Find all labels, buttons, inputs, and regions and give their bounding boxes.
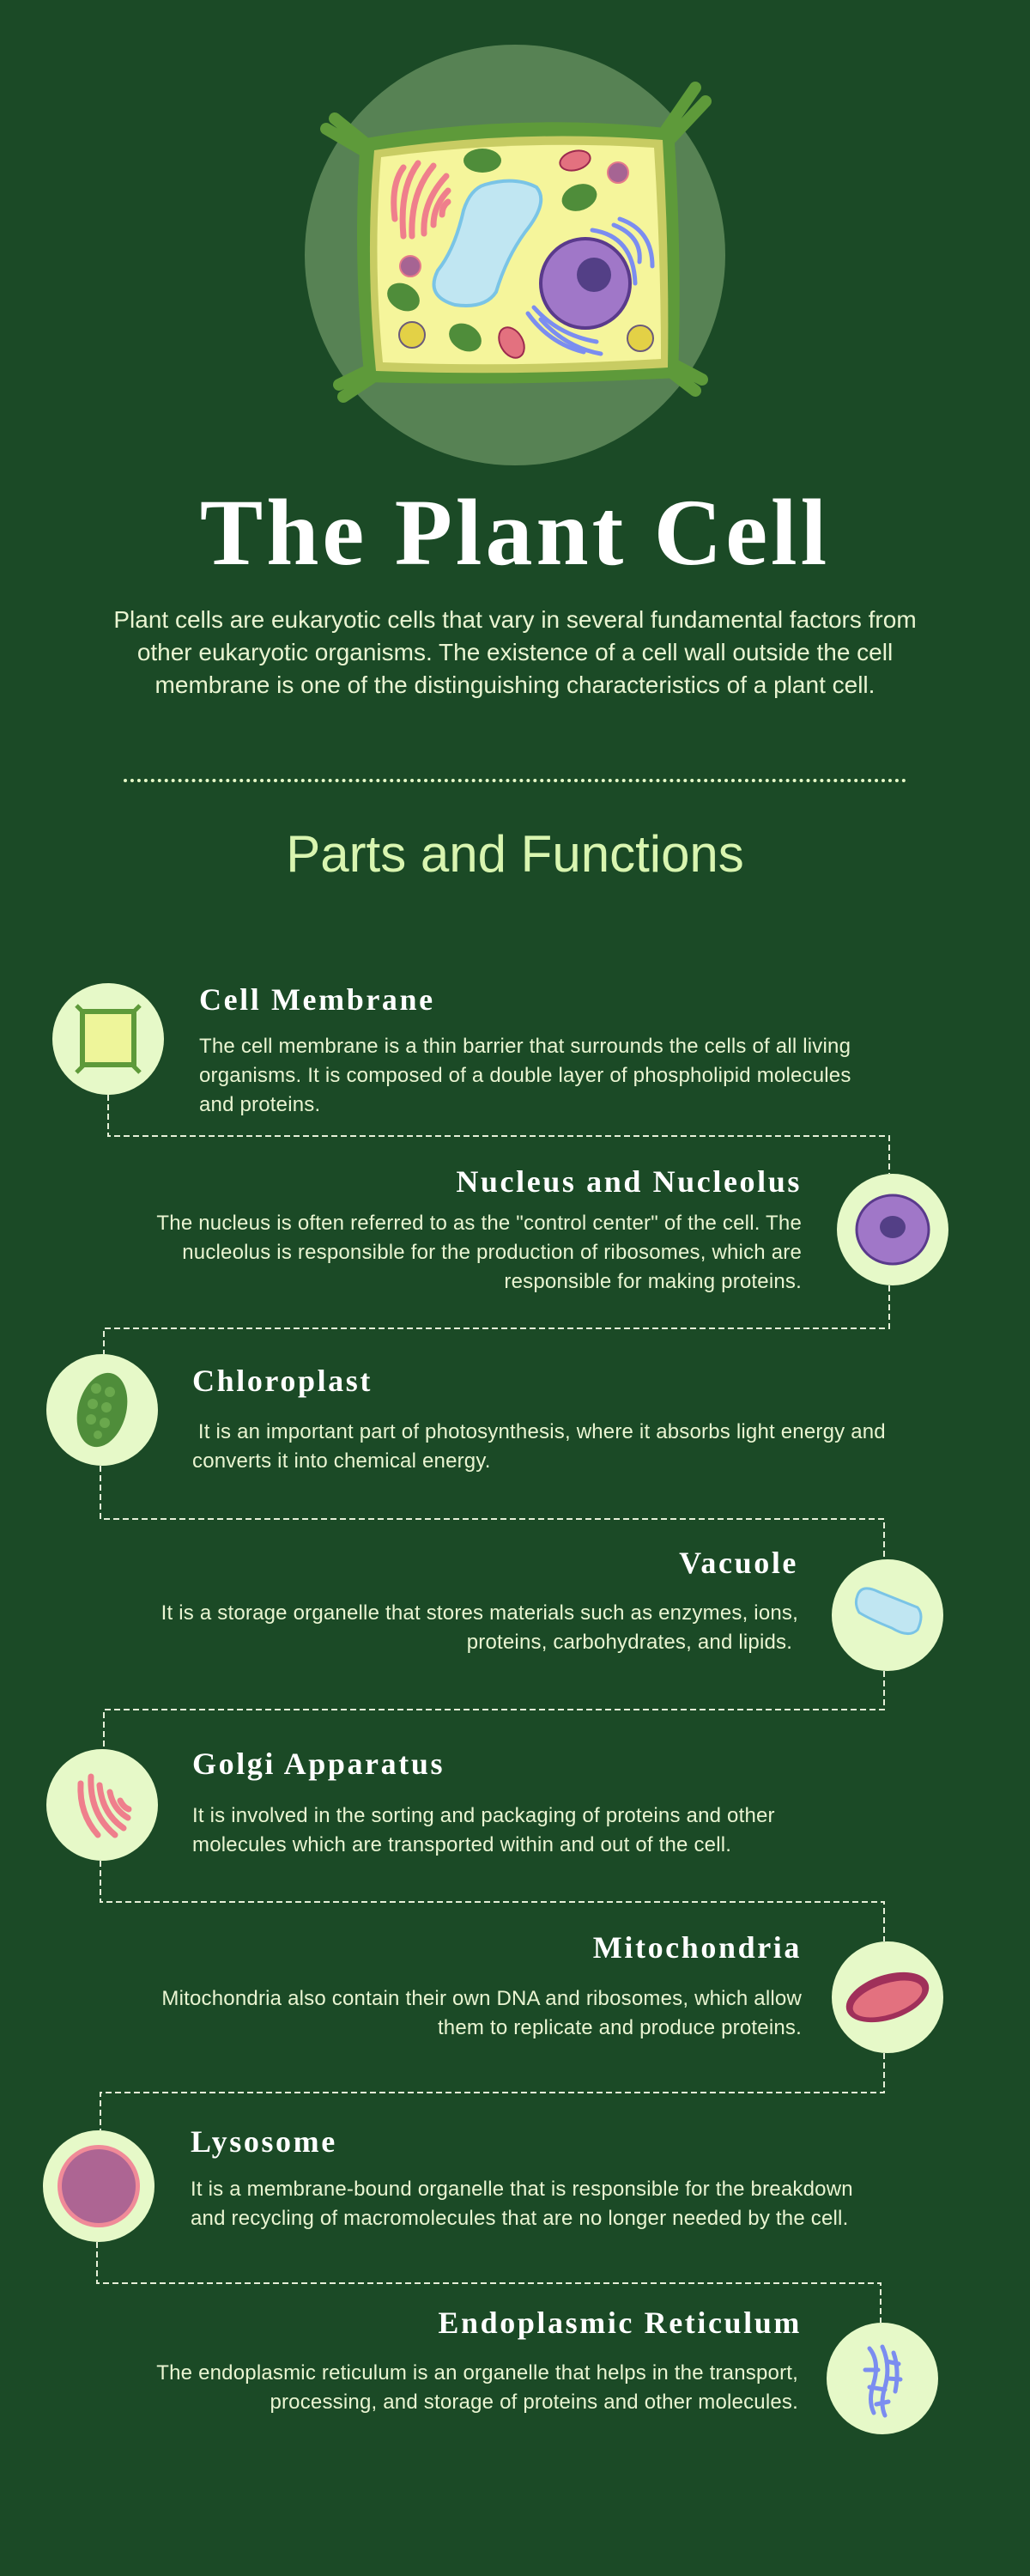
- item: cell membrane: and proteins.: [199, 1093, 320, 1116]
- item: mitochondria: [161, 1930, 943, 2053]
- intro text: [113, 606, 917, 698]
- intro text: Plant cells are eukaryotic cells that vary in several fundamental factors from: [113, 606, 917, 633]
- item: endoplasmic reticulum: The endoplasmic reticulum is an organelle that helps in the transport,: [156, 2361, 798, 2385]
- icon: chloroplast: [46, 1354, 158, 1466]
- icon: lysosome: [43, 2130, 154, 2242]
- item: lysosome: [43, 2124, 853, 2242]
- intro text: other eukaryotic organisms. The existence of a cell wall outside the cell: [137, 639, 893, 665]
- chloroplasts: [382, 149, 601, 357]
- item: cell membrane: The cell membrane is a thin barrier that surrounds the cells of all living: [199, 1035, 851, 1058]
- item: golgi: It is involved in the sorting and packaging of proteins and other: [192, 1804, 775, 1827]
- icon: cell membrane: [52, 983, 164, 1095]
- section heading: Parts and Functions: [286, 825, 744, 883]
- item: vacuole: It is a storage organelle that stores materials such as enzymes, ions,: [161, 1601, 798, 1625]
- icon: vacuole: [832, 1559, 943, 1671]
- item: golgi: [46, 1747, 775, 1861]
- item: lysosome: It is a membrane-bound organelle that is responsible for the breakdown: [191, 2178, 853, 2201]
- item: vacuole: [161, 1546, 943, 1671]
- item: chloroplast: Chloroplast: [192, 1364, 373, 1398]
- item: lysosome: and recycling of macromolecules that are no longer needed by the cell.: [191, 2207, 848, 2230]
- intro text: membrane is one of the distinguishing characteristics of a plant cell.: [155, 671, 875, 698]
- item: lysosome: Lysosome: [191, 2124, 337, 2159]
- item: nucleus: Nucleus and Nucleolus: [456, 1164, 802, 1199]
- item: vacuole: Vacuole: [679, 1546, 798, 1580]
- title: The Plant Cell: [200, 480, 830, 585]
- item: mitochondria: Mitochondria also contain their own DNA and ribosomes, which allow: [161, 1987, 802, 2010]
- icon: golgi apparatus: [46, 1749, 158, 1861]
- item: endoplasmic reticulum: Endoplasmic Reticulum: [438, 2306, 802, 2340]
- item: chloroplast: converts it into chemical energy.: [192, 1449, 491, 1473]
- item: endoplasmic reticulum: processing, and storage of proteins and other molecules.: [270, 2391, 798, 2414]
- vacuole: [434, 181, 541, 306]
- item: endoplasmic reticulum: [156, 2306, 938, 2434]
- item: mitochondria: them to replicate and produce proteins.: [438, 2016, 802, 2039]
- item: cell membrane: organisms. It is composed of a double layer of phospholipid molecules: [199, 1064, 851, 1087]
- item: cell membrane: [52, 982, 851, 1116]
- mitochondria: [494, 148, 592, 362]
- nucleus: [541, 239, 630, 328]
- item: nucleus: responsible for making proteins.: [504, 1270, 802, 1293]
- item: cell membrane: Cell Membrane: [199, 982, 435, 1017]
- item: nucleus: The nucleus is often referred to as the "control center" of the cell. The: [156, 1212, 802, 1235]
- item: golgi: molecules which are transported within and out of the cell.: [192, 1833, 731, 1856]
- item: chloroplast: [46, 1354, 886, 1473]
- golgi: [394, 163, 448, 236]
- icon: mitochondria: [832, 1941, 943, 2053]
- ER: [528, 219, 652, 354]
- item: golgi: Golgi Apparatus: [192, 1747, 445, 1781]
- item: chloroplast: It is an important part of photosynthesis, where it absorbs light energy and: [198, 1420, 886, 1443]
- item: nucleus: [156, 1164, 948, 1293]
- icon: nucleus: [837, 1174, 948, 1285]
- item: vacuole: proteins, carbohydrates, and lipids.: [467, 1631, 792, 1654]
- item: mitochondria: Mitochondria: [593, 1930, 802, 1965]
- icon: endoplasmic reticulum: [827, 2323, 938, 2434]
- hero illustration: plant cell: [305, 45, 725, 465]
- item: nucleus: nucleolus is responsible for the production of ribosomes, which are: [182, 1241, 802, 1264]
